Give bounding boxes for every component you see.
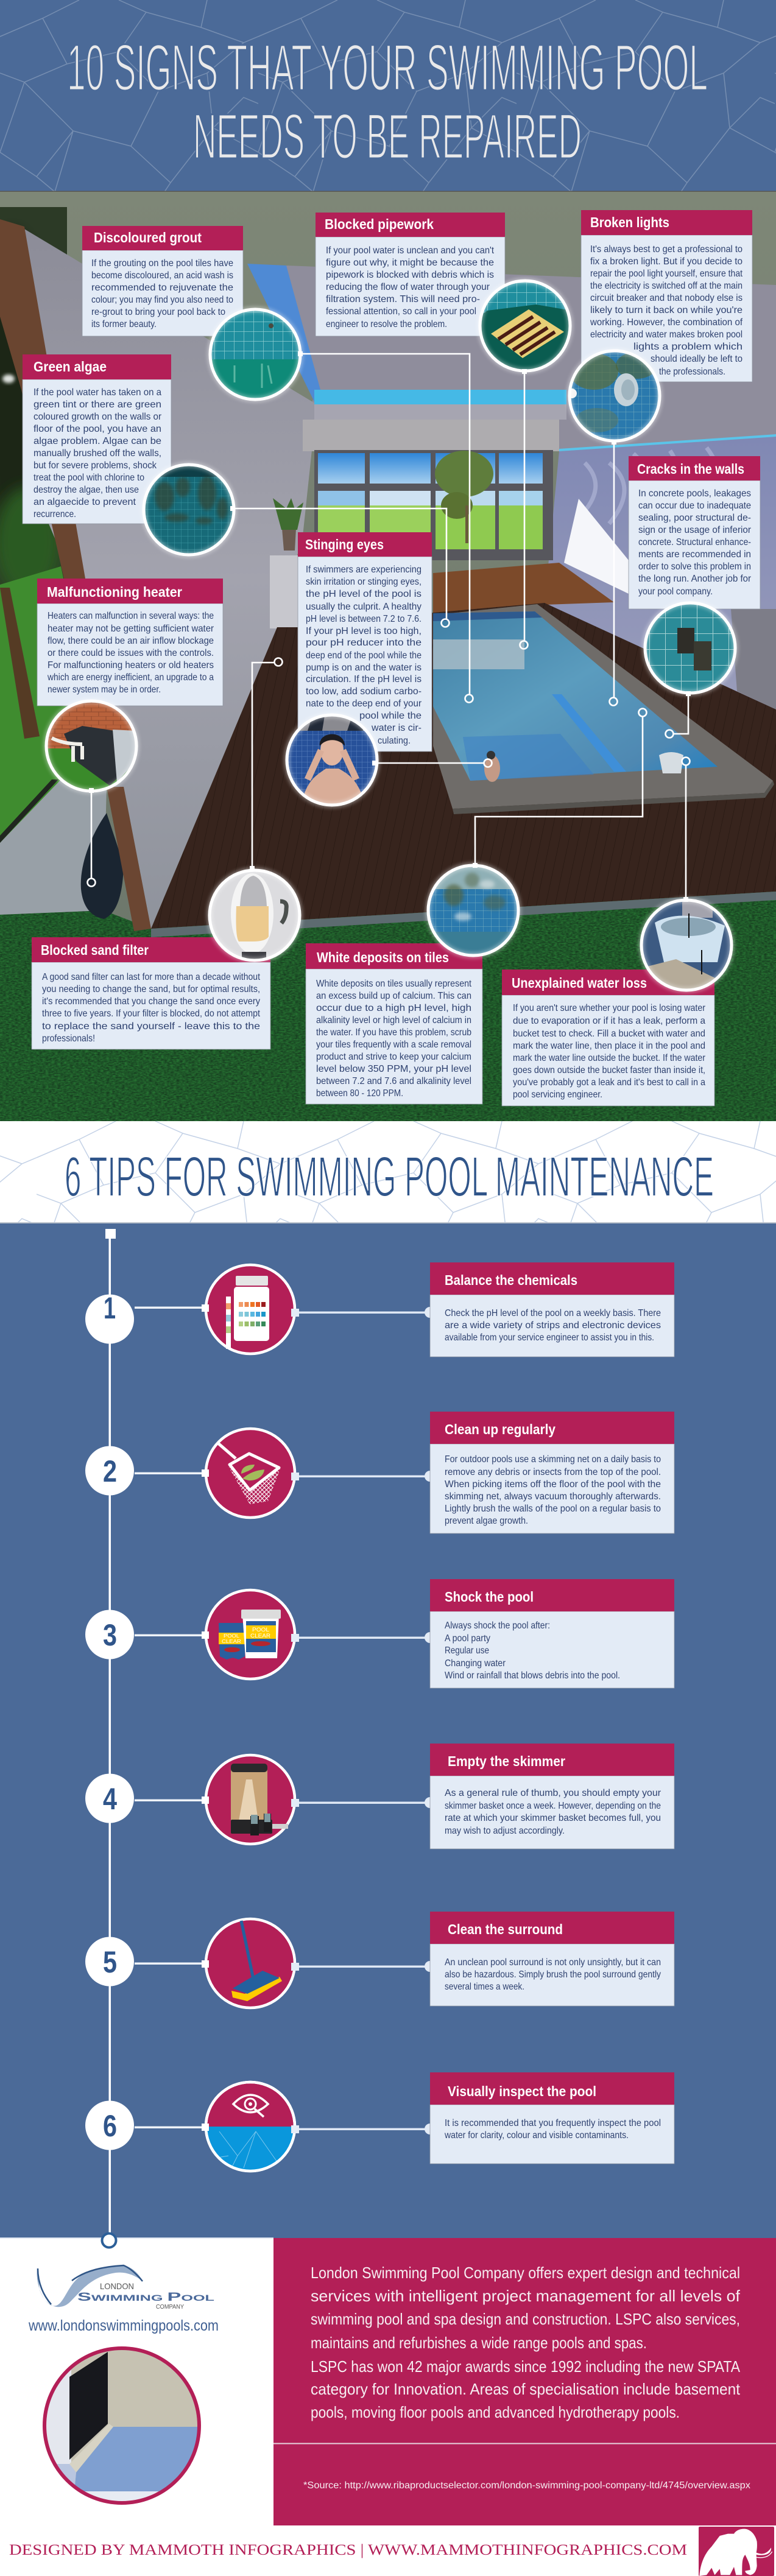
card: clean the surround: Clean the surround <box>448 1921 563 1937</box>
icon: pool clear shock tubs: POOL <box>224 1633 240 1639</box>
text: stinging eyes: culating. <box>378 736 411 746</box>
text: green algae: but for severe problems, shock <box>34 460 157 471</box>
text: blocked sand filter: professionals! <box>42 1033 95 1044</box>
text: green algae: recurrence. <box>34 509 76 519</box>
text: green algae: an algaecide to prevent <box>34 497 136 507</box>
heading: unexplained water loss: Unexplained water loss <box>512 975 647 991</box>
text: malfunctioning heater: or there could be issues with the controls. <box>48 648 214 658</box>
text: white deposits on tiles: White deposits on tiles usually represent <box>316 979 471 989</box>
text: blocked sand filter: you needing to change the sand, but for optimal results, <box>42 984 260 994</box>
heading: green algae: Green algae <box>34 359 107 375</box>
photo circle: discoloured grout <box>210 308 303 402</box>
text: white deposits on tiles: between 80 - 120 PPM. <box>316 1088 403 1099</box>
text: stinging eyes: pH level is between 7.2 to 7.6. <box>306 614 422 624</box>
logo: mammoth <box>699 2527 774 2576</box>
text: green algae: green tint or there are green <box>34 399 161 410</box>
text: blocked pipework: fessional attention, so call in your pool <box>326 306 476 317</box>
card: empty the skimmer: skimmer basket once a week. However, depending on the <box>445 1801 661 1811</box>
card: visually inspect the pool: It is recommended that you frequently inspect the pool <box>445 2118 661 2128</box>
photo circle: blocked sand filter <box>208 866 301 962</box>
text: broken lights: likely to turn it back on while you're <box>590 305 742 315</box>
company text: pools, moving floor pools and advanced hydrotherapy pools. <box>311 2403 680 2421</box>
icon: brush <box>202 1919 299 2008</box>
card: clean the surround: several times a week. <box>445 1982 524 1992</box>
number 6: 6 <box>103 2109 117 2143</box>
photo circle: stinging eyes <box>286 714 379 807</box>
number 1: 1 <box>104 1291 116 1325</box>
panel: stinging eyes <box>298 532 432 751</box>
header panel <box>0 0 776 192</box>
text: white deposits on tiles <box>316 979 471 1099</box>
text: green algae: treat the pool with chlorine to <box>34 473 144 483</box>
text: stinging eyes: usually the culprit. A healthy <box>306 602 422 612</box>
text: discoloured grout <box>91 258 233 329</box>
text: cracks in the walls: concrete. Structural enhance- <box>638 537 751 547</box>
company text: services with intelligent project management for all levels of <box>311 2287 741 2305</box>
photo circle: cracks in the walls <box>644 602 736 696</box>
card: empty the skimmer <box>425 1744 674 1849</box>
tip 6: visually inspect the pool <box>85 2072 674 2175</box>
text: white deposits on tiles: your tiles frequently with a scale removal <box>316 1040 471 1050</box>
text: green algae: destroy the algae, then use <box>34 485 139 495</box>
text: stinging eyes <box>306 565 422 746</box>
text: unexplained water loss: mark the water line outside the bucket. If the water <box>513 1053 706 1063</box>
text: unexplained water loss: due to evaporation or if it has a leak, perform a <box>513 1016 705 1026</box>
footer credit <box>0 2525 776 2576</box>
text: blocked pipework: figure out why, it might be because the <box>326 258 494 268</box>
panel: white deposits on tiles <box>306 943 482 1104</box>
text: stinging eyes: If swimmers are experiencing <box>306 565 422 575</box>
text: broken lights: working. However, the combination of <box>590 317 743 328</box>
text: green algae <box>34 387 162 519</box>
number 4: 4 <box>103 1782 117 1816</box>
card: clean the surround: An unclean pool surround is not only unsightly, but it can <box>445 1957 661 1968</box>
card: shock the pool: Shock the pool <box>445 1589 534 1605</box>
number 5: 5 <box>103 1945 117 1979</box>
text: broken lights: lights a problem which <box>633 342 742 352</box>
text: malfunctioning heater: flow, there could be an air inflow blockage <box>48 636 214 646</box>
panel: blocked pipework <box>316 213 505 336</box>
panel: green algae <box>23 354 171 524</box>
text: malfunctioning heater <box>47 611 214 695</box>
logo: London Swimming Pool Company: LONDON <box>100 2281 134 2291</box>
lawn <box>0 889 776 1121</box>
text: discoloured grout: colour; you may find you also need to <box>91 295 233 305</box>
text: unexplained water loss: you've probably got a leak and it's best to call in a <box>513 1077 705 1088</box>
text: blocked sand filter: three to five years. If your filter is blocked, do not attempt <box>42 1008 260 1019</box>
connector lines with ring markers <box>88 354 690 899</box>
card: clean up regularly: prevent algae growth. <box>445 1516 528 1526</box>
company text: maintains and refurbishes a wide range pools and spas. <box>311 2334 647 2352</box>
panel: unexplained water loss <box>502 970 714 1106</box>
text: blocked sand filter: it's recommended that you change the sand once every <box>42 996 260 1007</box>
text: stinging eyes: too low, add sodium carbo- <box>306 686 422 697</box>
tip 3: shock the pool <box>85 1579 674 1688</box>
text: white deposits on tiles: an excess build up of calcium. This can <box>316 991 471 1001</box>
text: broken lights: should ideally be left to <box>651 354 742 364</box>
text: cracks in the walls: sign or the usage of inferior <box>638 525 752 535</box>
card: shock the pool: Always shock the pool after: <box>445 1621 550 1631</box>
text: blocked pipework: engineer to resolve the problem. <box>326 319 447 329</box>
section heading panel: 6 tips <box>0 1121 776 1223</box>
text: cracks in the walls: sealing, poor structural de- <box>638 513 751 523</box>
heading: discoloured grout: Discoloured grout <box>94 230 202 245</box>
card: visually inspect the pool: water for clarity, colour and visible contaminants. <box>444 2130 629 2141</box>
heading: malfunctioning heater: Malfunctioning heater <box>47 584 182 600</box>
text: cracks in the walls: ments are recommended in <box>638 549 751 560</box>
company text: London Swimming Pool Company offers expert design and technical <box>311 2264 740 2282</box>
text: white deposits on tiles: between 7.2 and 7.6 and alkalinity level <box>316 1076 471 1086</box>
card: shock the pool <box>425 1579 674 1688</box>
text: malfunctioning heater: heater may not be getting sufficient water <box>48 624 214 634</box>
logo: London Swimming Pool Company: COMPANY <box>156 2304 184 2310</box>
text: stinging eyes: nate to the deep end of your <box>306 699 422 709</box>
heading: blocked pipework: Blocked pipework <box>325 216 434 232</box>
photo circle: broken lights <box>567 350 661 445</box>
tip 5: clean the surround <box>85 1912 674 2008</box>
card: empty the skimmer: As a general rule of thumb, you should empty your <box>445 1788 661 1798</box>
text: green algae: manually brushed off the walls, <box>34 448 161 459</box>
text: blocked sand filter: A good sand filter can last for more than a decade without <box>42 972 260 982</box>
company text: category for Innovation. Areas of specialisation include basement <box>311 2380 741 2398</box>
card: clean up regularly: remove any debris or insects from the top of the pool. <box>445 1467 661 1477</box>
panel: broken lights <box>581 210 752 382</box>
tip 2: clean up regularly <box>85 1412 674 1533</box>
panel: discoloured grout <box>82 226 243 336</box>
text: unexplained water loss: bucket test to check. Fill a bucket with water and <box>513 1029 705 1039</box>
logo: London Swimming Pool Company <box>37 2265 215 2310</box>
text: green algae: coloured growth on the walls or <box>34 412 162 422</box>
icon: test strip bottle <box>202 1265 299 1354</box>
text: broken lights: repair the pool light yourself, ensure that <box>590 269 742 279</box>
text: broken lights: the electricity is switched off at the main <box>590 281 742 291</box>
text: cracks in the walls: order to solve this problem in <box>638 561 751 572</box>
text: malfunctioning heater: Heaters can malfunction in several ways: the <box>48 611 214 621</box>
panel: blocked sand filter <box>32 937 270 1049</box>
card: balance the chemicals <box>425 1262 674 1357</box>
card: clean the surround <box>425 1912 674 2006</box>
text: green algae: algae problem. Algae can be <box>34 436 161 446</box>
tips panel background <box>0 1223 776 2238</box>
photo circle: white deposits <box>427 863 520 957</box>
text: blocked pipework: reducing the flow of water through your <box>326 282 490 292</box>
photo circle: unexplained water loss <box>640 897 733 993</box>
text: discoloured grout: re-grout to bring your pool back to <box>91 307 225 317</box>
website url: www.londonswimmingpools.com <box>28 2317 219 2334</box>
text: malfunctioning heater: newer system may be in order. <box>48 684 161 695</box>
plant <box>270 498 303 628</box>
text: unexplained water loss: pool servicing engineer. <box>513 1089 602 1100</box>
text: unexplained water loss: mark the water line, then place it in the pool and <box>513 1041 705 1051</box>
text: broken lights <box>590 244 743 377</box>
text: malfunctioning heater: which are energy inefficient, an upgrade to a <box>47 672 214 683</box>
card: visually inspect the pool <box>425 2072 674 2164</box>
card: clean up regularly: Lightly brush the walls of the pool on a regular basis to <box>445 1504 661 1514</box>
card: clean up regularly <box>425 1412 674 1533</box>
text: stinging eyes: deep end of the pool while the <box>306 650 422 661</box>
card: shock the pool: Regular use <box>445 1645 489 1656</box>
card: balance the chemicals: available from your service engineer to assist you in this. <box>445 1332 654 1343</box>
photo circle: pool <box>44 2346 200 2505</box>
text: white deposits on tiles: the water. If you have this problem, scrub <box>316 1027 471 1038</box>
text: blocked pipework: If your pool water is unclean and you can't <box>326 245 495 256</box>
card: clean the surround: also be hazardous. Simply brush the pool surround gently <box>445 1969 661 1980</box>
text: green algae: floor of the pool, you have an <box>34 424 161 434</box>
timeline spine <box>105 1229 116 2235</box>
text: white deposits on tiles: occur due to a high pH level, high <box>316 1003 471 1013</box>
footer left panel <box>0 2234 273 2525</box>
text: discoloured grout: recommended to rejuvenate the <box>91 283 233 293</box>
card: balance the chemicals: are a wide variety of strips and electronic devices <box>445 1320 661 1331</box>
icon: skimming net <box>202 1429 299 1518</box>
photo circle: green algae <box>143 463 235 556</box>
icon: pool clear shock tubs: POOL <box>252 1627 269 1633</box>
text: unexplained water loss <box>513 1003 706 1100</box>
photo circle: blocked pipework <box>479 280 571 374</box>
text: broken lights: electricity and water makes broken pool <box>590 329 742 340</box>
icon: pool clear shock tubs: CLEAR <box>222 1639 241 1644</box>
text: white deposits on tiles: alkalinity level or high level of calcium in <box>316 1015 471 1026</box>
text: broken lights: the professionals. <box>659 367 725 377</box>
text: cracks in the walls: your pool company. <box>638 586 713 597</box>
text: stinging eyes: pour pH reducer into the <box>306 638 422 648</box>
panel: malfunctioning heater <box>37 579 223 706</box>
logo: London Swimming Pool Company: S WIMMING P OOL <box>77 2291 215 2304</box>
heading: white deposits on tiles: White deposits on tiles <box>317 949 449 965</box>
card: clean up regularly: skimming net, always vacuum thoroughly afterwards. <box>445 1491 661 1502</box>
text: stinging eyes: water is cir- <box>371 723 422 733</box>
card: shock the pool: Wind or rainfall that blows debris into the pool. <box>445 1670 620 1681</box>
text: stinging eyes: the pH level of the pool is <box>306 589 422 599</box>
icon: eye and water <box>202 2082 299 2175</box>
text: cracks in the walls: the long run. Another job for <box>638 574 752 584</box>
icon: pool clear shock tubs: CLEAR <box>250 1633 271 1639</box>
text: unexplained water loss: If you aren't sure whether your pool is losing water <box>513 1003 706 1013</box>
text: discoloured grout: its former beauty. <box>91 319 157 329</box>
heading: stinging eyes: Stinging eyes <box>305 537 384 552</box>
text: blocked pipework: pipework is blocked with debris which is <box>326 270 494 280</box>
title <box>67 30 708 172</box>
card: empty the skimmer: may wish to adjust accordingly. <box>445 1826 565 1836</box>
heading: cracks in the walls: Cracks in the walls <box>637 461 744 477</box>
text: stinging eyes: skin irritation or stinging eyes, <box>306 577 422 587</box>
card: shock the pool: Changing water <box>445 1658 506 1669</box>
timeline end marker <box>102 2234 116 2247</box>
tip 1: balance the chemicals <box>85 1262 674 1357</box>
text: stinging eyes: pool while the <box>359 711 422 721</box>
text: green algae: If the pool water has taken on a <box>34 387 161 398</box>
text: blocked sand filter: to replace the sand yourself - leave this to the <box>42 1021 260 1032</box>
text: blocked pipework <box>326 245 495 329</box>
text: cracks in the walls: can occur due to inadequate <box>638 501 751 511</box>
company description panel <box>273 2238 776 2525</box>
card: clean up regularly: Clean up regularly <box>445 1421 556 1437</box>
text: cracks in the walls <box>638 488 752 597</box>
card: visually inspect the pool: Visually inspect the pool <box>448 2083 596 2099</box>
text: blocked pipework: filtration system. This will need pro- <box>326 294 480 304</box>
window <box>314 450 553 560</box>
heading: blocked sand filter: Blocked sand filter <box>41 942 149 958</box>
photo circle: malfunctioning heater <box>45 700 138 793</box>
card: balance the chemicals: Check the pH level of the pool on a weekly basis. There <box>445 1308 661 1318</box>
tip 4: empty the skimmer <box>85 1744 674 1849</box>
card: balance the chemicals: Balance the chemicals <box>445 1272 577 1288</box>
number 3: 3 <box>103 1618 117 1652</box>
text: white deposits on tiles: level below 350 PPM, your pH level <box>316 1064 471 1074</box>
pool scene background <box>0 192 776 1121</box>
text: broken lights: circuit breaker and that nobody else is <box>590 293 742 303</box>
text: discoloured grout: become discoloured, an acid wash is <box>91 270 233 281</box>
card: shock the pool: A pool party <box>445 1633 490 1644</box>
icon: skimmer filter <box>202 1755 299 1844</box>
text: broken lights: fix a broken light. But if you decide to <box>590 256 742 267</box>
card: empty the skimmer: rate at which your skimmer basket becomes full, you <box>445 1813 661 1823</box>
number 2: 2 <box>103 1454 117 1488</box>
text: white deposits on tiles: product and strive to keep your calcium <box>316 1052 471 1062</box>
text: broken lights: It's always best to get a professional to <box>590 244 742 255</box>
text: blocked sand filter <box>42 972 260 1044</box>
text: unexplained water loss: goes down outside the bucket faster than inside it, <box>513 1065 705 1075</box>
text: malfunctioning heater: For malfunctioning heaters or old heaters <box>48 660 214 670</box>
source note: *Source: http://www.ribaproductselector.com/london-swimming-pool-company-ltd/4745/overview.aspx <box>303 2480 750 2491</box>
text: stinging eyes: pump is on and the water is <box>306 663 422 673</box>
text: discoloured grout: If the grouting on the pool tiles have <box>91 258 233 269</box>
card: empty the skimmer: Empty the skimmer <box>448 1753 565 1769</box>
card: clean up regularly: For outdoor pools use a skimming net on a daily basis to <box>445 1454 661 1465</box>
swimming pool <box>433 604 774 814</box>
panel: cracks in the walls <box>629 456 760 609</box>
icon: pool clear shock tubs <box>202 1590 299 1679</box>
designer credit text: DESIGNED BY MAMMOTH INFOGRAPHICS | WWW.MAMMOTHINFOGRAPHICS.COM <box>9 2542 687 2558</box>
text: cracks in the walls: In concrete pools, leakages <box>638 488 751 499</box>
heading: broken lights: Broken lights <box>590 214 669 230</box>
text: stinging eyes: circulation. If the pH level is <box>306 674 422 684</box>
company text <box>311 2264 741 2421</box>
card: clean up regularly: When picking items off the floor of the pool with the <box>445 1479 661 1490</box>
text: stinging eyes: If your pH level is too high, <box>306 626 422 636</box>
